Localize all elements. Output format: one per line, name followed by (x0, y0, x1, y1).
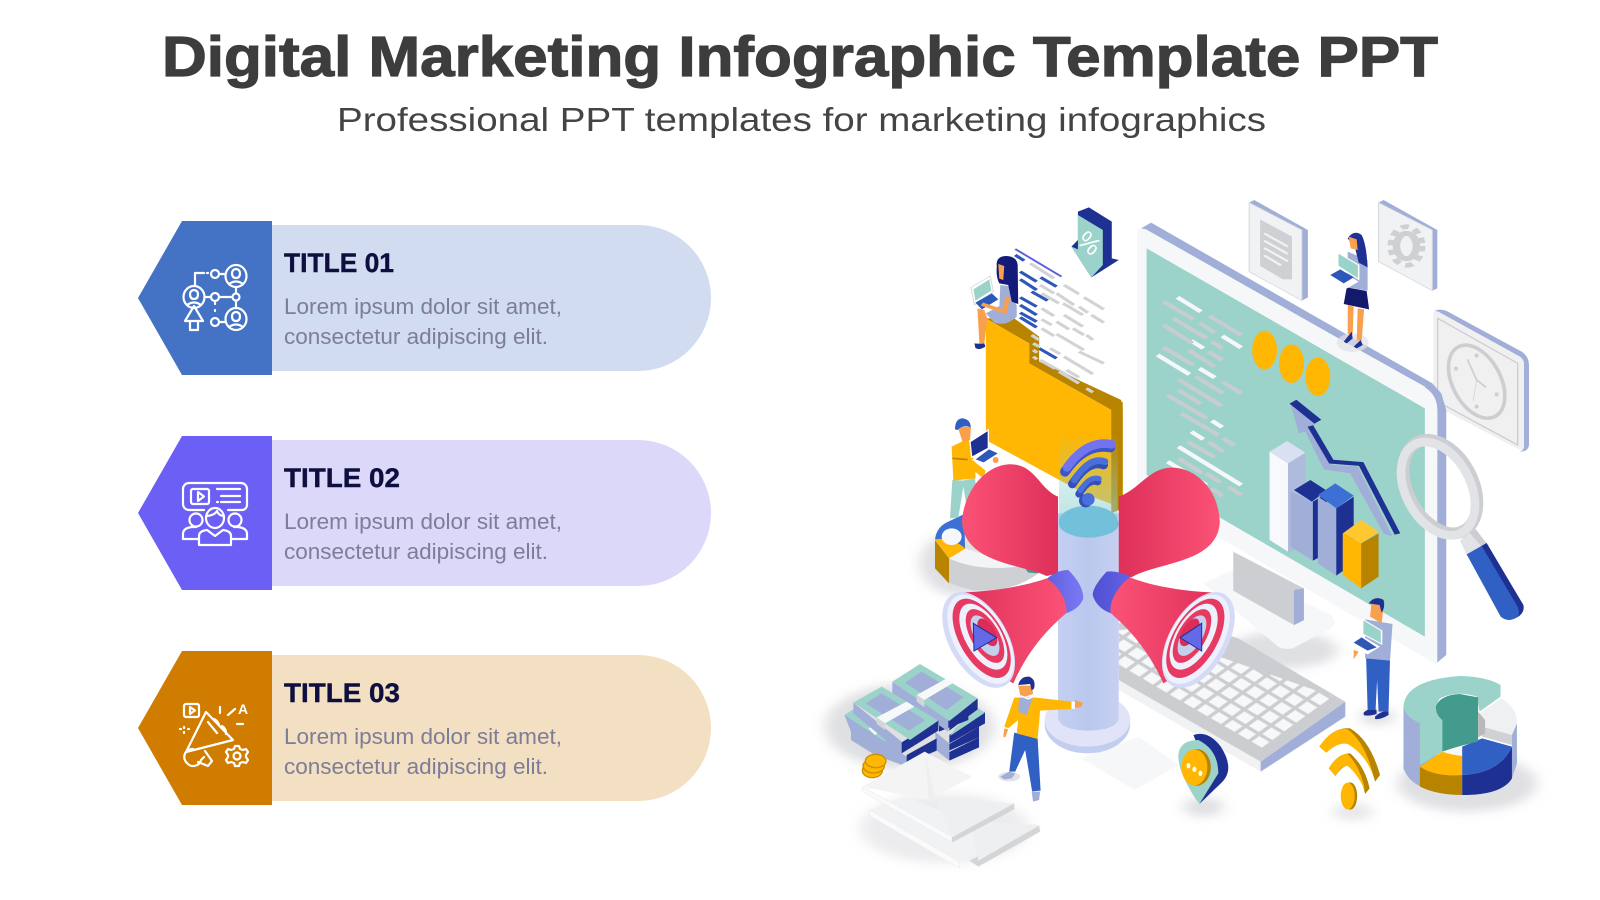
front left stack (844, 687, 938, 767)
icon: document card (1249, 200, 1308, 301)
monitor stand (1203, 552, 1335, 649)
pie chart and man on the left (935, 418, 1038, 590)
lower layer: shadows, stand and keyboard (825, 530, 1537, 863)
pie chart: left (935, 514, 1038, 590)
title: Digital Marketing Infographic Template PPT (162, 25, 1438, 89)
money stacks and coins (844, 664, 985, 778)
growth arrow (1290, 402, 1397, 537)
lower megaphones (927, 570, 1250, 700)
icon: percent arrow (1071, 207, 1119, 277)
person: woman standing on monitor (1324, 233, 1369, 352)
pie chart: right (1403, 676, 1517, 795)
heading: title 02: TITLE 02 (284, 463, 400, 493)
coins (862, 754, 886, 778)
panel: title 02 (138, 436, 711, 590)
icon: megaphone and gear: A (238, 701, 248, 717)
subtitle: Professional PPT templates for marketing infographics (337, 101, 1266, 138)
icon: megaphone and gear (180, 701, 248, 766)
person: woman sitting on folder (971, 256, 1018, 349)
person: man with laptop on left (947, 418, 1004, 543)
text block: title 02: consectetur adipiscing elit. (284, 539, 548, 564)
text block: title 03: Lorem ipsum dolor sit amet, (284, 724, 562, 749)
icon: location pin (1178, 734, 1228, 804)
text block: title 01: Lorem ipsum dolor sit amet, (284, 294, 562, 319)
magnifying glass (1386, 427, 1524, 620)
text block: title 03: consectetur adipiscing elit. (284, 754, 548, 779)
pole (1045, 511, 1130, 753)
panel: title 01 (138, 221, 711, 375)
panel: title 03 (138, 651, 711, 805)
text block: title 01 (284, 294, 562, 349)
illustration: digital marketing isometric scene (825, 200, 1537, 868)
icon: blue wifi (1065, 444, 1112, 507)
icon: clock card (1433, 310, 1529, 452)
icon: gear card (1379, 200, 1437, 291)
icon: yellow wifi (1319, 728, 1380, 810)
heading: title 01: TITLE 01 (284, 248, 394, 278)
megaphone: lower left (927, 570, 1083, 700)
document sheet with code lines (1015, 248, 1106, 382)
top layer of the scene (971, 200, 1446, 663)
text block: title 02: Lorem ipsum dolor sit amet, (284, 509, 562, 534)
code lines on screen (1158, 297, 1241, 496)
keyboard (1119, 617, 1345, 772)
heading: title 03: TITLE 03 (284, 678, 400, 708)
folder (986, 318, 1123, 513)
shadows (825, 530, 1537, 863)
floor shadow under pole (1081, 737, 1178, 790)
megaphone: upper left (962, 464, 1058, 576)
glass cylinder and wifi icon (1059, 433, 1118, 538)
text block: title 01: consectetur adipiscing elit. (284, 324, 548, 349)
person: man pointing (998, 677, 1083, 802)
monitor (1137, 223, 1446, 663)
envelopes (862, 752, 1040, 868)
text block: title 02 (284, 509, 562, 564)
icon: percent arrow: % (1071, 226, 1107, 261)
megaphone: upper right (1119, 468, 1220, 577)
bar chart (1270, 441, 1379, 588)
icon: network of people (184, 265, 246, 330)
icon: audience and video (183, 483, 247, 545)
lower layer: people, pole and props (962, 464, 1517, 810)
text block: title 03 (284, 724, 562, 779)
back right stack (892, 664, 985, 761)
megaphone: lower right (1093, 571, 1250, 700)
three yellow dots (1252, 331, 1330, 396)
person: man with laptop on right (1347, 598, 1393, 719)
